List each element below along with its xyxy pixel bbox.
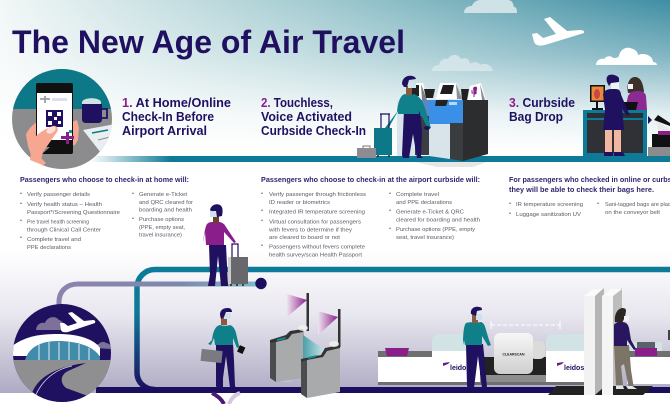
heading: step 2: 2. Touchless, [261,96,333,110]
thermal camera monitor [590,85,605,109]
bullets: column 1 right: boarding and health [139,208,192,214]
bullets: column 1 left: • [20,218,22,224]
bullets: column 1 left: PPE declarations [27,245,71,251]
illustration: kiosks [397,83,488,161]
bullets: column 2 left: Integrated IR temperature screening [269,210,365,216]
infographic drawing: Airport Arrival [122,124,207,138]
illustration: bag drop counter [583,75,670,156]
lavender route band [59,284,261,305]
bullets: column 2 right: • [389,226,391,232]
bullets: column 1 right [132,191,193,238]
icon: smartphone [30,83,74,164]
bullets: column 3: • [509,211,511,217]
lower lavender panel [0,250,670,393]
bullets: column 1 left [20,191,120,251]
logo: leidos right: leidos [564,365,584,372]
bullets: column 2 right: • [389,191,391,197]
logo: leidos left: leidos [450,365,470,372]
icon: airplane top [532,17,584,46]
illustration: screening conveyor [378,321,602,385]
illustration: man with briefcase [201,308,245,388]
illustration: bag drop exit conveyor [627,330,670,384]
navy route band [96,387,670,393]
ticket [83,124,112,152]
bullets: column 1 right: • [132,216,134,222]
bullets: column 1 left: Complete travel and [27,237,81,243]
subheading: column 2: Passengers who choose to check-in at the airport curbside will: [261,175,480,184]
illustration: screening conveyor: CLEARSCAN [503,352,525,356]
bullets: column 1 left: • [20,191,22,197]
bullets: column 2 left: with fevers to determine if they [268,228,352,234]
illustration: man at scanner [463,307,491,388]
bullets: column 2 left: Verify passenger through frictionless [269,192,366,198]
teal horizontal band top [90,156,670,162]
bullets: column 2 left: are cleared to board or not [269,235,340,241]
cloud: faint middle [432,55,493,71]
sky panel [0,0,670,158]
bullets: column 2 right [389,191,480,241]
bullets: column 3: Luggage sanitization UV [516,212,581,218]
icon: terminal circle [12,303,112,404]
infographic drawing: Curbside Check-In [261,124,366,138]
bullets: column 2 right: and PPE declarations [396,200,452,206]
bullets: column 2 left [261,191,366,258]
bullets: column 1 right: and QRC cleared for [139,200,193,206]
suitcase [374,128,392,155]
bullets: column 1 right: Purchase options [139,217,184,223]
bullets: column 2 right: Purchase options (PPE, empty [396,227,475,233]
illustration: screening portals [584,288,622,395]
bullets: column 1 left: Pre travel health screening [27,220,89,226]
bullets: column 3: • [597,201,599,207]
bullets: column 2 left: Virtual consultation for passengers [269,220,361,226]
bullets: column 1 left: through Clinical Call Center [27,228,101,234]
bullets: column 2 left: • [261,191,263,197]
bullets: column 1 right: Generate e-Ticket [139,192,187,198]
traveller at counter [603,75,630,156]
cloud: top centre [464,0,517,13]
bullets: column 1 left: • [20,235,22,241]
teal route band with curve [137,270,670,390]
illustration: woman with suitcase [203,204,248,286]
bullets: column 2 left: • [261,243,263,249]
hand back [26,120,79,168]
bullets: column 2 right: • [389,208,391,214]
bullets: column 2 left: Passengers without fevers complete [269,244,365,250]
bullets: column 2 left: • [261,218,263,224]
icon: airplane in terminal circle [60,312,95,332]
title: The New Age of Air Travel [12,24,405,60]
bullets: column 1 left: Verify passenger details [27,192,90,198]
heading: step 1: 1. At Home/Online [122,96,231,110]
illustration: passenger at kiosk [357,76,431,158]
subheading: column 3 [509,175,670,194]
logo: leidos right [557,362,584,372]
cloud: right white [596,48,657,65]
infographic drawing: Voice Activated [261,110,352,124]
dimension arrow [491,321,560,329]
bullets: column 3: on the conveyor belt [605,210,660,216]
bullets: column 2 right: Complete travel [396,192,439,198]
bullets: column 3 [509,201,670,218]
purple route arcs [212,393,240,404]
route end dot [255,278,267,289]
bullets: column 1 right: travel insurance) [139,232,182,238]
bullets: column 2 right: Generate e-Ticket & QRC [396,210,464,216]
icon: phone check-in circle [12,69,115,169]
subheading: column 3: they will be able to check their bags here. [509,185,654,194]
kiosk floor shadow [415,162,487,167]
bullets: column 2 left: health survey/scan Health Passport [269,252,362,258]
bullets: column 2 right: cleared for boarding and health [396,218,480,224]
agent [625,77,647,110]
floor mat [548,386,653,395]
infographic drawing: Check-In Before [122,110,214,124]
bullets: column 1 right: • [132,191,134,197]
icon: mug [82,98,107,123]
bullets: column 3: • [509,201,511,207]
bullets: column 3: IR temperature screening [516,202,583,208]
bullets: column 1 left: Verify health status – Health [27,202,102,208]
bullets: column 1 left: • [20,201,22,207]
subheading: column 1: Passengers who choose to check-in at home will: [20,175,189,184]
illustration: e-gates [270,293,340,398]
bullets: column 1 left: Passport*/Screening Questionnaire [27,210,120,216]
bullets: column 1 right: (PPE, empty seat, [139,225,185,231]
bullets: column 2 right: seat, travel insurance) [396,235,454,241]
logo: leidos left [443,362,470,372]
bullets: column 2 left: ID reader or biometrics [269,200,330,206]
bullets: column 2 left: • [261,208,263,214]
illustration: woman at bag drop [614,308,637,389]
infographic drawing: Bag Drop [509,110,563,124]
heading: step 3: 3. Curbside [509,96,575,110]
